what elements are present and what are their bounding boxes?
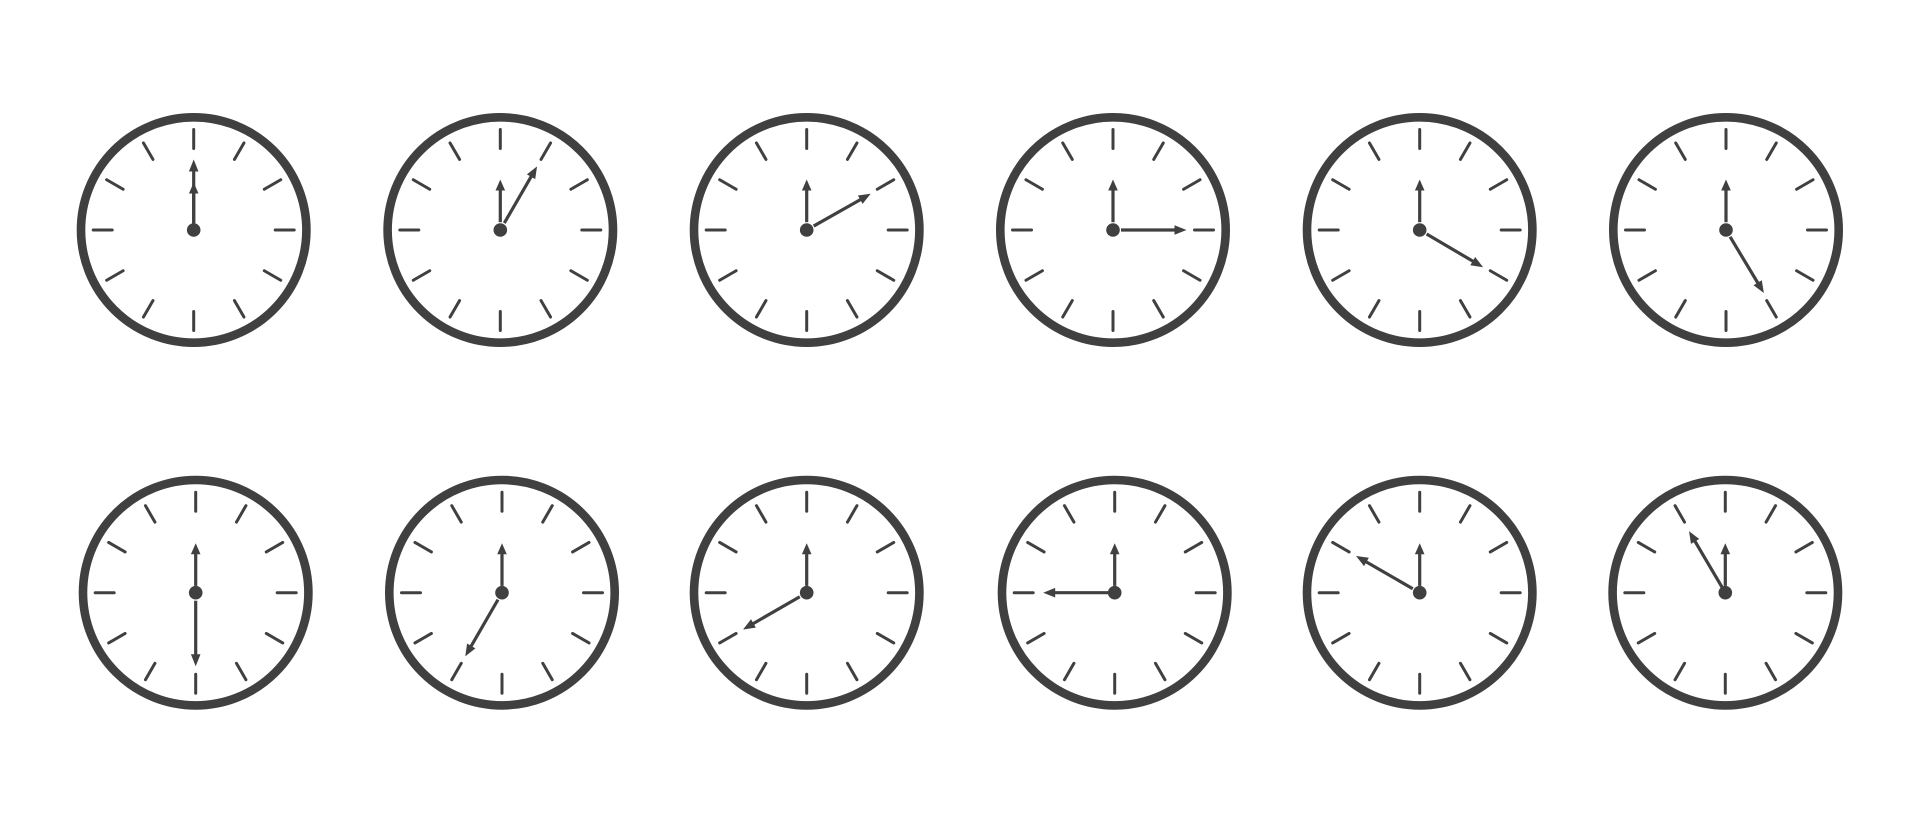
- hour hand: [1415, 180, 1424, 222]
- clock: 10 o'clock: [1307, 480, 1532, 705]
- dial: [694, 117, 919, 343]
- dial: [388, 117, 613, 343]
- clock: 11 o'clock: [1613, 480, 1838, 705]
- minute hand: [1354, 552, 1415, 593]
- dial: [694, 480, 919, 705]
- minute hand: [1043, 588, 1109, 598]
- clock: 5 o'clock: [1613, 117, 1839, 343]
- dial: [83, 480, 308, 705]
- dial: [1307, 480, 1532, 705]
- hour hand: [1110, 543, 1120, 586]
- clock: 3 o'clock: [1000, 117, 1226, 343]
- dial: [81, 117, 306, 343]
- hour hand: [189, 182, 198, 225]
- clock: 2 o'clock: [694, 117, 919, 343]
- dial: [1613, 480, 1838, 705]
- minute hand: [1121, 225, 1186, 235]
- minute hand: [741, 593, 802, 634]
- minute hand: [1685, 529, 1726, 590]
- minute hand: [189, 160, 198, 225]
- dial: [389, 480, 615, 705]
- dial: [1000, 117, 1226, 343]
- dial: [1613, 117, 1839, 343]
- hour hand: [1720, 543, 1730, 586]
- hour hand: [191, 543, 200, 586]
- minute hand: [1726, 234, 1768, 295]
- dial: [1307, 117, 1532, 343]
- hour hand: [1108, 180, 1118, 222]
- clock: 4 o'clock: [1307, 117, 1532, 343]
- clock: 8 o'clock: [694, 480, 919, 705]
- hour hand: [496, 180, 505, 222]
- clock: 7 o'clock: [389, 480, 615, 705]
- minute hand: [191, 601, 200, 666]
- hour hand: [802, 543, 812, 586]
- hour hand: [497, 543, 507, 586]
- clock: 6 o'clock: [83, 480, 308, 705]
- minute hand: [1424, 230, 1486, 271]
- clock: 12 o'clock: [81, 117, 306, 343]
- hour hand: [1721, 180, 1731, 222]
- dial: [1002, 480, 1227, 705]
- minute hand: [461, 597, 502, 659]
- clock: 1 o'clock: [388, 117, 613, 343]
- hour hand: [802, 180, 812, 222]
- clock: 9 o'clock: [1002, 480, 1227, 705]
- hour hand: [1415, 543, 1424, 586]
- minute hand: [500, 164, 541, 225]
- minute hand: [811, 190, 873, 230]
